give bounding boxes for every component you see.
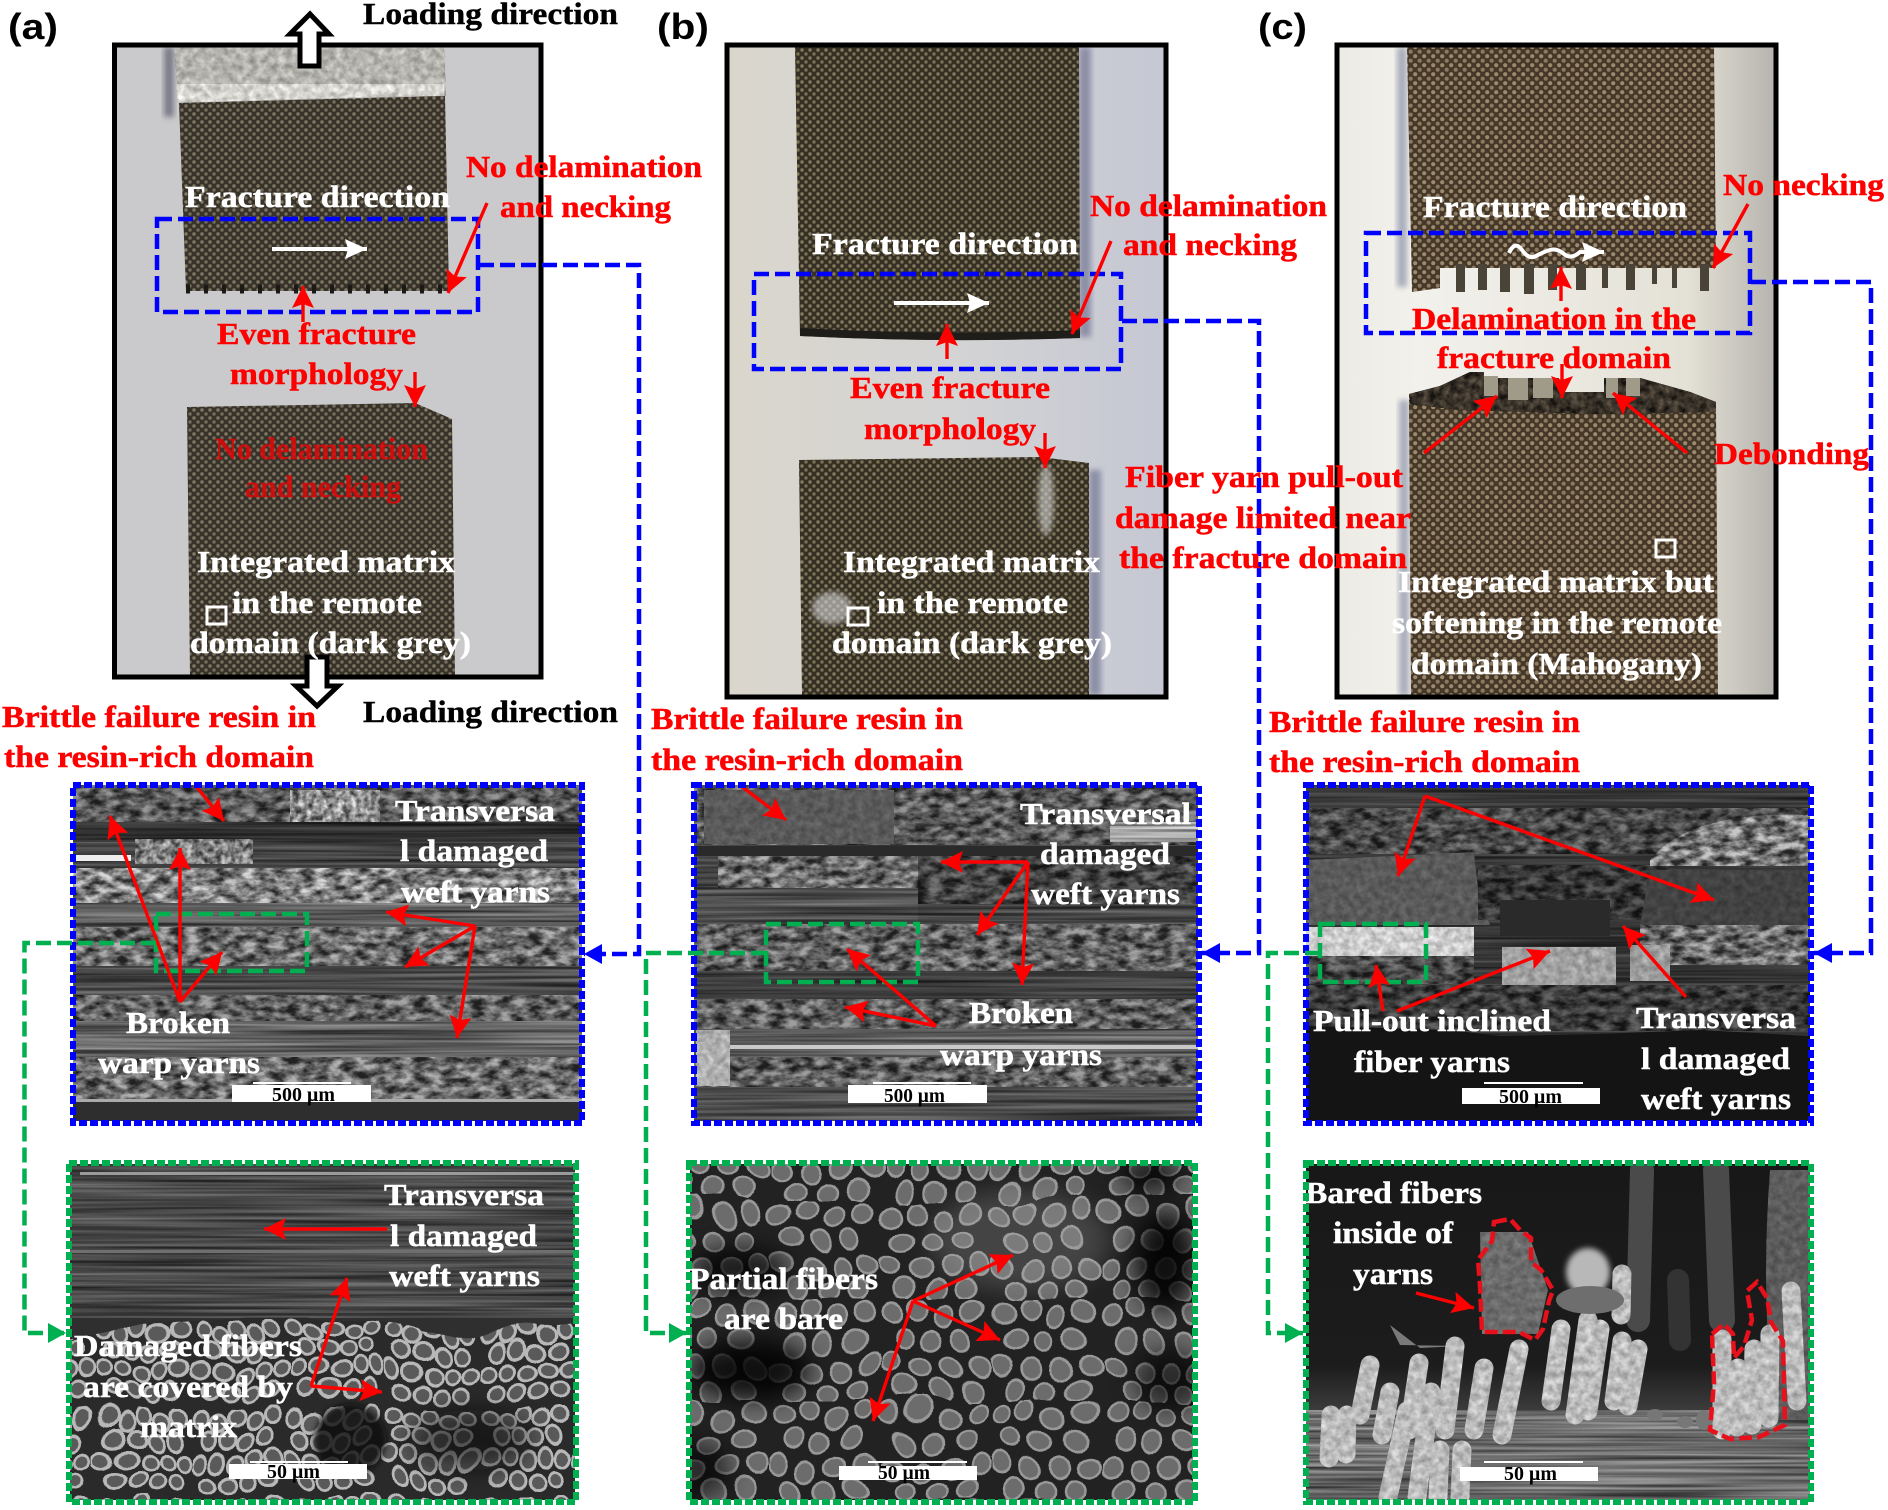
label: integrated matrix: [832, 544, 1112, 660]
label: transversal damaged weft yarns: damaged: [1040, 836, 1170, 871]
label: broken warp yarns: Broken: [969, 995, 1073, 1030]
SEM a: high magnification: [50, 1163, 600, 1510]
callout: brittle failure: Brittle failure resin in: [651, 701, 963, 736]
callout: no necking: [1713, 167, 1885, 268]
label: damaged fibers covered by matrix: matrix: [140, 1409, 238, 1444]
frame: [689, 1163, 1195, 1502]
green connector b: [646, 953, 766, 1333]
scale bar 500 um: 500 µm: [884, 1085, 945, 1107]
label: integrated matrix: in the remote: [877, 585, 1068, 620]
callout: even fracture morphology: [850, 324, 1050, 468]
frame: [73, 785, 582, 1123]
label: broken warp yarns: Broken: [126, 1005, 230, 1040]
photo frame: [727, 45, 1166, 697]
label: partial fibers are bare: [689, 1261, 878, 1336]
panel label (b): (b): [657, 6, 709, 47]
label: integrated matrix softening: softening in the remote: [1392, 605, 1722, 640]
inner green crop box: [1320, 924, 1426, 982]
inner green crop box: [156, 914, 307, 971]
red arrows: [1376, 796, 1714, 1011]
label: transversal damaged weft yarns: weft yarns: [1641, 1081, 1791, 1116]
red arrows: [110, 786, 475, 1038]
wavy white fracture arrow: [1509, 246, 1604, 257]
label: integrated matrix: Integrated matrix: [843, 544, 1101, 579]
fracture direction label: Fracture direction: [812, 226, 1078, 261]
label: transversal damaged weft yarns: weft yarns: [1031, 876, 1180, 911]
scale bar 50 um: 50 µm: [878, 1462, 930, 1484]
label: broken warp yarns: [98, 1005, 260, 1080]
scale bar 50 um: [229, 1461, 367, 1483]
scale bar 500 um: 500 µm: [272, 1084, 335, 1106]
label: partial fibers are bare: Partial fibers: [689, 1261, 878, 1296]
SEM c: low magnification: [1306, 785, 1811, 1123]
white specimen marker square: [1656, 540, 1675, 557]
label: integrated matrix: domain (dark grey): [832, 625, 1112, 660]
callout: even fracture morphology: Even fracture: [850, 370, 1050, 405]
panel: (c): [1258, 6, 1885, 1502]
callout: no delamination and necking: [1072, 188, 1327, 334]
frame: [1306, 1163, 1811, 1502]
scale bar 500 um: 500 µm: [1499, 1086, 1562, 1108]
callout: no delamination and necking: [448, 149, 702, 293]
label: pull-out inclined fiber yarns: fiber yarns: [1354, 1044, 1510, 1079]
blue dashed fracture region: [157, 219, 478, 312]
label: transversal damaged weft yarns: weft yarns: [389, 1258, 540, 1293]
label: transversal damaged weft yarns: [1020, 796, 1191, 911]
connector from region to SEM c: [1751, 282, 1871, 953]
callout: fiber yarn pull-out: damage limited near: [1115, 500, 1411, 535]
callout: no necking: No necking: [1723, 167, 1885, 202]
callout: fiber yarn pull-out: Fiber yarn pull-out: [1125, 459, 1404, 494]
photo: fractured specimen c: [1339, 47, 1775, 697]
label: broken warp yarns: warp yarns: [98, 1045, 260, 1080]
photo: fractured specimen a: [116, 47, 540, 676]
scale bar 500 um: [232, 1083, 371, 1106]
callout: no delamination and necking: and necking: [500, 189, 672, 224]
scale bar 500 um: [1462, 1083, 1600, 1108]
label: transversal damaged weft yarns: weft yarns: [401, 874, 550, 909]
callout: delamination in the fracture domain: [1412, 267, 1696, 398]
label: transversal damaged weft yarns: l damaged: [1641, 1041, 1790, 1076]
callout: brittle failure: [651, 701, 963, 777]
label: damaged fibers covered by matrix: are covered by: [83, 1369, 294, 1404]
label on lower specimen: No delamination: [215, 431, 428, 466]
label: bared fibers inside of yarns: yarns: [1353, 1256, 1433, 1291]
frame: [694, 785, 1199, 1123]
label: bared fibers inside of yarns: inside of: [1333, 1215, 1454, 1250]
callout: no delamination and necking: No delamination: [466, 149, 702, 184]
label: bared fibers inside of yarns: [1305, 1175, 1482, 1291]
fracture direction label: Fracture direction: [185, 179, 450, 214]
blue dashed fracture region: [1366, 233, 1750, 333]
callout: fiber yarn pull-out: [1115, 459, 1411, 575]
label: transversal damaged weft yarns: Transversa: [395, 793, 556, 828]
callout: even fracture morphology: [217, 286, 416, 407]
label: pull-out inclined fiber yarns: [1313, 1003, 1551, 1079]
label: transversal damaged weft yarns: [395, 793, 556, 909]
callout: brittle failure: Brittle failure resin in: [2, 699, 316, 734]
label: integrated matrix: [190, 544, 471, 660]
label: transversal damaged weft yarns: [384, 1177, 545, 1293]
frame: [69, 1163, 576, 1502]
callout: brittle failure: Brittle failure resin in: [1269, 704, 1580, 739]
callout: even fracture morphology: morphology: [230, 356, 404, 391]
frame: [1306, 785, 1811, 1123]
label: transversal damaged weft yarns: l damaged: [400, 833, 548, 868]
photo frame: [1337, 45, 1776, 697]
green connector c: [1268, 953, 1320, 1333]
scale bar 50 um: [839, 1462, 977, 1484]
top loading arrow: [290, 14, 329, 66]
white fracture arrow: [272, 247, 367, 251]
label: integrated matrix softening: [1392, 564, 1722, 681]
callout: delamination in the fracture domain: fracture domain: [1437, 340, 1671, 375]
callout: brittle failure: [2, 699, 316, 774]
callout: fiber yarn pull-out: the fracture domain: [1119, 540, 1407, 575]
callout: no delamination and necking: and necking: [1123, 227, 1298, 262]
dashed outline: bared fiber cluster 2: [1710, 1282, 1785, 1439]
SEM b: low magnification: [694, 785, 1199, 1123]
label: transversal damaged weft yarns: Transversa: [1636, 1000, 1797, 1035]
label: transversal damaged weft yarns: [1636, 1000, 1797, 1116]
connector from region to SEM b: [1122, 321, 1259, 953]
callout: no delamination and necking: No delamination: [1090, 188, 1327, 223]
callout: brittle failure: the resin-rich domain: [1269, 744, 1580, 779]
inner green crop box: [766, 924, 918, 982]
label: bared fibers inside of yarns: Bared fibers: [1305, 1175, 1482, 1210]
label: integrated matrix: Integrated matrix: [197, 544, 456, 579]
loading direction labels: Loading direction: [363, 694, 618, 729]
label: integrated matrix softening: Integrated matrix but: [1398, 564, 1715, 599]
label: transversal damaged weft yarns: l damaged: [390, 1218, 537, 1253]
scale bar 50 um: 50 µm: [267, 1461, 320, 1483]
SEM a: low magnification: [73, 785, 582, 1123]
red arrows: [741, 786, 1028, 1026]
connector from region to SEM a: [479, 265, 639, 954]
label on lower specimen: [215, 431, 428, 504]
callout: debonding: Debonding: [1714, 436, 1870, 471]
loading direction labels: [363, 0, 618, 729]
SEM c: high magnification: [1305, 1163, 1811, 1502]
callout: even fracture morphology: Even fracture: [217, 316, 416, 351]
blue dashed fracture region: [754, 274, 1121, 369]
label: transversal damaged weft yarns: Transversa: [384, 1177, 545, 1212]
photo frame: [114, 45, 541, 677]
label on lower specimen: and necking: [245, 469, 401, 504]
dashed outline: bared fiber cluster 1: [1478, 1219, 1553, 1340]
scale bar 50 um: [1460, 1462, 1598, 1485]
scale bar 500 um: [848, 1083, 987, 1107]
arrows to debonded and pulled-out yarns: [1424, 393, 1687, 453]
red arrows: [873, 1255, 1013, 1421]
callout: brittle failure: [1269, 704, 1580, 779]
label: damaged fibers covered by matrix: [74, 1328, 302, 1444]
label: pull-out inclined fiber yarns: Pull-out inclined: [1313, 1003, 1551, 1038]
red arrow to bared fibers: [1416, 1293, 1474, 1308]
green connector a: [24, 943, 156, 1333]
label: damaged fibers covered by matrix: Damaged fibers: [74, 1328, 302, 1363]
callout: delamination in the fracture domain: Delamination in the: [1412, 301, 1696, 336]
bottom loading arrow: [296, 657, 338, 706]
panel: (a): [2, 0, 702, 1510]
callout: even fracture morphology: morphology: [864, 411, 1037, 446]
SEM b: high magnification: [686, 1160, 1198, 1505]
label: integrated matrix softening: domain (Mahogany): [1411, 646, 1702, 681]
white specimen marker square: [848, 608, 868, 625]
callout: brittle failure: the resin-rich domain: [651, 742, 963, 777]
white specimen marker square: [207, 607, 226, 624]
red arrows: [264, 1229, 387, 1392]
label: broken warp yarns: [940, 995, 1102, 1072]
label: broken warp yarns: warp yarns: [940, 1037, 1102, 1072]
label: partial fibers are bare: are bare: [724, 1301, 843, 1336]
panel label (a): (a): [8, 6, 58, 47]
label: integrated matrix: domain (dark grey): [190, 625, 471, 660]
panel label (c): (c): [1258, 6, 1307, 47]
label: transversal damaged weft yarns: Transversal: [1020, 796, 1191, 831]
scale bar 50 um: 50 µm: [1504, 1463, 1557, 1485]
white fracture arrow: [894, 301, 989, 305]
callout: brittle failure: the resin-rich domain: [4, 739, 314, 774]
photo: fractured specimen b: [729, 47, 1165, 697]
panel: (b): [646, 6, 1411, 1510]
fracture direction label: Fracture direction: [1423, 189, 1687, 224]
label: integrated matrix: in the remote: [232, 585, 422, 620]
